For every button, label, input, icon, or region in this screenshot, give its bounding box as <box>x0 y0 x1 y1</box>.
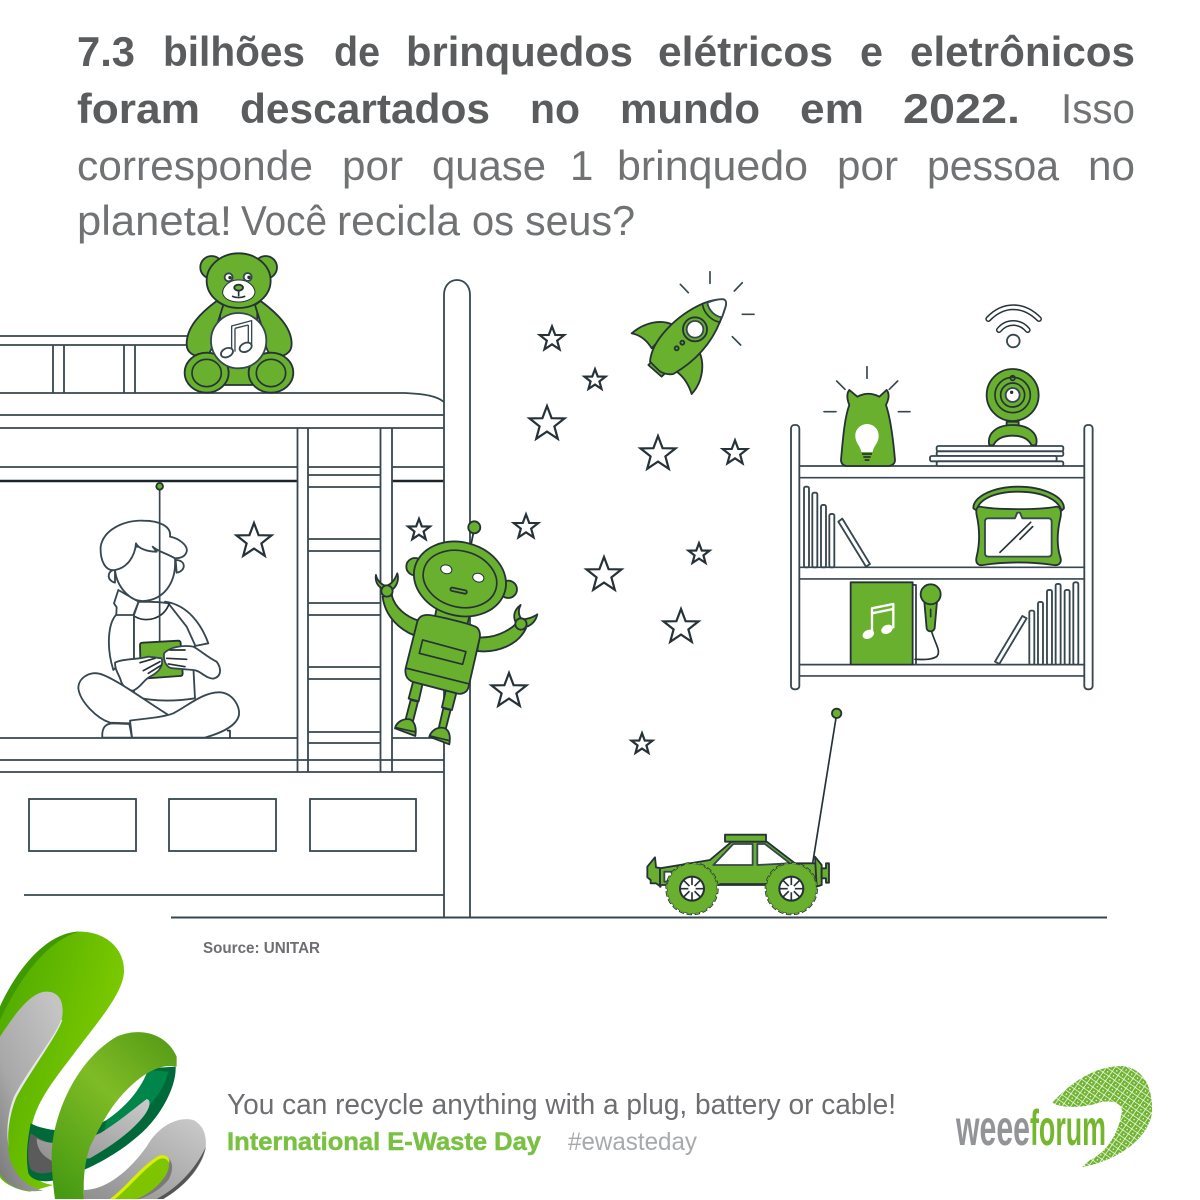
hashtag: #ewasteday <box>568 1128 697 1156</box>
weeeforum logo: weee <box>955 1100 1030 1156</box>
heading paragraph: por <box>342 142 403 189</box>
ground line <box>171 916 1107 918</box>
rear wheel <box>667 863 717 914</box>
heading paragraph: de <box>334 28 380 75</box>
heading paragraph: por <box>837 142 898 189</box>
books lower right <box>995 582 1078 665</box>
child sitting with tablet <box>78 483 239 738</box>
heading paragraph: pessoa <box>927 142 1060 189</box>
heading paragraph <box>77 28 1135 244</box>
webcam <box>987 369 1039 445</box>
bookshelf <box>791 307 1093 689</box>
heading paragraph: elétricos <box>658 28 833 75</box>
rocket <box>632 272 754 394</box>
heading paragraph: bilhões <box>163 28 305 75</box>
heading paragraph: 7.3 <box>77 28 135 75</box>
heading paragraph: Isso <box>1061 85 1135 132</box>
heading paragraph: descartados <box>240 85 490 132</box>
source note: Source: UNITAR <box>203 940 320 957</box>
footer slogan: You can recycle anything with a plug, battery or cable! <box>227 1089 896 1121</box>
heading paragraph: planeta! <box>77 197 232 244</box>
book stack <box>930 446 1063 466</box>
heading paragraph: em <box>800 85 864 132</box>
lamp <box>824 367 910 466</box>
heading paragraph: quase <box>432 142 546 189</box>
microphone <box>915 584 941 660</box>
robot <box>376 521 537 744</box>
heading paragraph: brinquedos <box>406 28 633 75</box>
weeeforum logo <box>955 1066 1152 1167</box>
heading paragraph: Você <box>241 197 327 244</box>
footer campaign name: International E-Waste Day <box>227 1128 541 1156</box>
heading paragraph: recicla <box>337 197 461 244</box>
heading paragraph: corresponde <box>77 142 313 189</box>
music book <box>851 582 916 665</box>
bunk bed <box>0 280 470 917</box>
heading paragraph: mundo <box>620 85 760 132</box>
heading paragraph: e <box>860 28 883 75</box>
weeeforum logo: forum <box>1030 1100 1106 1156</box>
teddy bear <box>185 253 293 393</box>
heading paragraph: 1 <box>570 142 593 189</box>
stars <box>236 326 747 753</box>
books upper left <box>804 487 870 567</box>
remote control car <box>647 709 841 914</box>
heading paragraph: eletrônicos <box>910 28 1135 75</box>
heading paragraph: os <box>472 197 514 244</box>
heading paragraph: no <box>530 85 580 132</box>
heading paragraph: 2022. <box>903 85 1020 132</box>
front wheel <box>766 863 817 914</box>
heading paragraph: brinquedo <box>617 142 808 189</box>
wifi signal <box>988 307 1039 347</box>
toy tablet <box>973 487 1064 565</box>
heading paragraph: no <box>1088 142 1135 189</box>
tablet antenna <box>157 487 162 642</box>
heading paragraph: foram <box>77 85 200 132</box>
heading paragraph: seus? <box>525 197 635 244</box>
e-waste day swirl logo <box>0 932 206 1199</box>
